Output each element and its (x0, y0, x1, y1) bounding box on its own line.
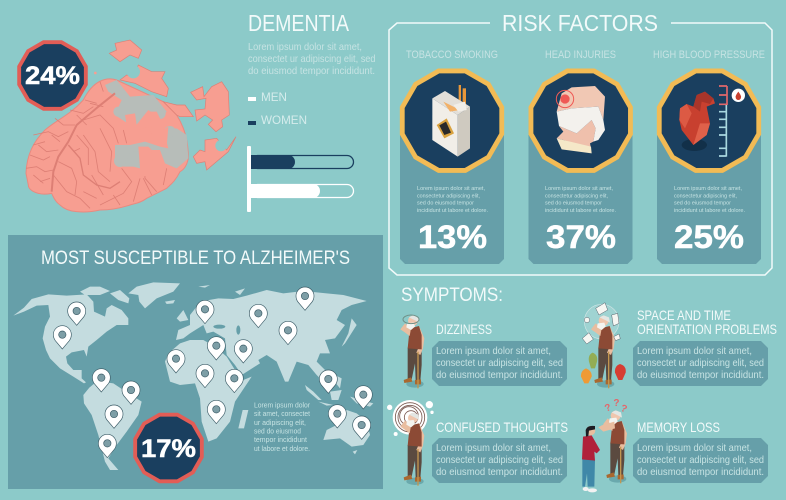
text block: dementia intro (248, 42, 376, 77)
card: head injuries: Lorem ipsum dolor sit amet, (545, 186, 613, 192)
location pins (53, 287, 372, 458)
figure: man and woman with question marks: ? (619, 403, 628, 415)
text block: dementia intro: Lorem ipsum dolor sit amet, (248, 42, 362, 53)
card: tobacco smoking: TOBACCO SMOKING (406, 49, 498, 61)
text block: map note: Lorem ipsum dolor (254, 400, 311, 410)
panel: brain illustration (26, 40, 236, 212)
figure: man and woman with question marks (582, 398, 628, 492)
badge: 24% (17, 40, 88, 111)
symptom: memory loss: MEMORY LOSS (637, 419, 720, 435)
figure: man and woman with question marks: ? (613, 398, 619, 409)
figure: man and woman with question marks: ? (603, 402, 613, 415)
symptom: confused thoughts: Lorem ipsum dolor sit amet, (436, 443, 551, 454)
card: tobacco smoking: incididunt ut labore et dolore. (417, 208, 488, 214)
brain fragments (109, 40, 236, 170)
text block: dementia intro: consectet ur adipiscing elit, sed (248, 54, 376, 65)
text block: map note: tempor incididunt (254, 435, 307, 444)
card: tobacco smoking: sed do eiusmod tempor (417, 200, 474, 206)
symptom: confused thoughts: consectet ur adipiscing elit, sed (436, 455, 563, 466)
badge: 24%: 24% (25, 62, 80, 90)
card: head injuries: 37% (546, 219, 616, 255)
card: high blood pressure: HIGH BLOOD PRESSURE (653, 49, 765, 61)
symptom: confused thoughts: do eiusmod tempor incididunt. (436, 467, 563, 478)
brain remaining pieces over grey (125, 112, 168, 177)
symptom: space and time orientation problems: consectet ur adipiscing elit, sed (637, 358, 764, 369)
card: head injuries (528, 49, 633, 264)
legend (248, 90, 307, 127)
heading: symptoms: SYMPTOMS: (401, 285, 503, 306)
world map: eurasia, africa, oceania (165, 285, 373, 454)
symptom: dizziness: DIZZINESS (436, 321, 492, 337)
symptom: confused thoughts (387, 400, 568, 486)
symptom: memory loss: consectet ur adipiscing elit, sed (637, 455, 764, 466)
symptom: dizziness: Lorem ipsum dolor sit amet, (436, 346, 551, 357)
card: tobacco smoking: consectetur adipiscing elit, (417, 194, 480, 200)
text block: map note: ur adipiscing elit, (254, 418, 306, 427)
icon: cigarette pack (432, 85, 470, 157)
icon: heart with pressure gauge (679, 86, 745, 157)
heading: risk factors: RISK FACTORS (502, 10, 658, 36)
badge: 17% (133, 413, 204, 483)
symptom: dizziness (400, 315, 567, 388)
card: high blood pressure: incididunt ut labore et dolore. (674, 208, 745, 214)
fragment notches (127, 65, 227, 151)
text block: map note: sit amet, consectet (254, 409, 310, 418)
figure: dizzy man (400, 315, 424, 388)
text block: map note: sed do eiusmod (254, 426, 301, 436)
text block: map note (254, 400, 311, 453)
figure: man with tangled thoughts (387, 400, 434, 486)
text block: map note: ut labore et dolore. (254, 444, 310, 453)
heading: dementia: DEMENTIA (248, 10, 350, 36)
panel: risk factors (389, 10, 772, 275)
world map: americas (13, 282, 180, 470)
card: tobacco smoking: Lorem ipsum dolor sit amet, (417, 186, 485, 192)
card: high blood pressure: 25% (674, 219, 744, 255)
symptom: dizziness: consectet ur adipiscing elit, sed (436, 358, 563, 369)
card: high blood pressure: sed do eiusmod tempor (674, 200, 731, 206)
card: head injuries: sed do eiusmod tempor (545, 200, 602, 206)
card: tobacco smoking (400, 49, 504, 264)
risk factors frame (389, 23, 772, 275)
legend: WOMEN (261, 113, 307, 127)
brain missing grey pieces (105, 80, 188, 168)
bar chart (247, 146, 354, 212)
card: head injuries: incididunt ut labore et dolore. (545, 208, 616, 214)
symptom: memory loss (582, 398, 768, 492)
card: high blood pressure: Lorem ipsum dolor sit amet, (674, 186, 742, 192)
symptom: memory loss: Lorem ipsum dolor sit amet, (637, 443, 752, 454)
brain folds (26, 82, 167, 208)
symptom: memory loss: do eiusmod tempor incididunt. (637, 467, 764, 478)
card: head injuries: HEAD INJURIES (545, 49, 616, 61)
card: high blood pressure (653, 49, 765, 264)
brain body (26, 79, 188, 212)
symptom: space and time orientation problems (581, 303, 777, 388)
symptom: confused thoughts: CONFUSED THOUGHTS (436, 419, 568, 435)
card: high blood pressure: consectetur adipiscing elit, (674, 194, 737, 200)
card: tobacco smoking: 13% (418, 219, 487, 255)
text block: dementia intro: do eiusmod tempor incididunt. (248, 66, 375, 77)
icon: injured head (556, 86, 605, 153)
symptom: space and time orientation problems: Lorem ipsum dolor sit amet, (637, 346, 752, 357)
fragment crumb (94, 72, 97, 74)
heading: most susceptible: MOST SUSCEPTIBLE TO ALZHEIMER'S (41, 248, 350, 269)
card: head injuries: consectetur adipiscing elit, (545, 194, 608, 200)
symptom: dizziness: do eiusmod tempor incididunt. (436, 370, 563, 381)
symptom: space and time orientation problems: do eiusmod tempor incididunt. (637, 370, 764, 381)
legend: MEN (261, 90, 287, 104)
panel: most susceptible to alzheimer's (8, 235, 383, 489)
symptom: space and time orientation problems: SPACE AND TIME (637, 307, 731, 323)
badge: 17%: 17% (141, 435, 196, 463)
figure: man with clocks and bulbs (581, 303, 626, 388)
